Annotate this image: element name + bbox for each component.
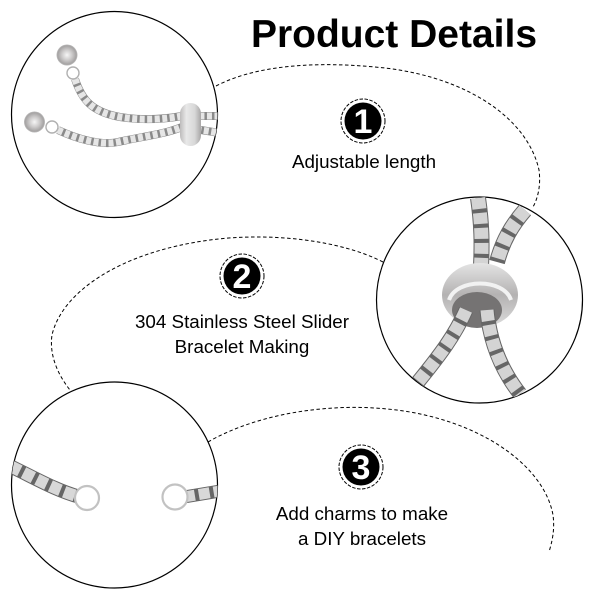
panel: right circle with slider close-up xyxy=(376,197,582,403)
slider bead xyxy=(442,263,518,327)
jump rings xyxy=(46,67,79,133)
chain: lower left strand xyxy=(418,310,466,382)
badge 2: 2 xyxy=(233,258,251,296)
chain: upper strand xyxy=(75,79,220,119)
end ball upper xyxy=(56,44,78,66)
chain: left strand xyxy=(10,466,80,497)
jump ring right xyxy=(162,484,188,510)
title: Product Details xyxy=(251,13,537,56)
connector: dashed line from circle 2 to circle 3 xyxy=(51,237,383,390)
connector: dashed line from circle 1 to circle 2 xyxy=(216,65,540,207)
text: stainless steel slider: 304 Stainless Steel Slider xyxy=(135,311,349,332)
slider bead xyxy=(180,103,201,146)
jump ring left xyxy=(75,486,99,510)
badge 3 xyxy=(339,445,383,489)
bead hole xyxy=(452,292,502,328)
text: adjustable length: Adjustable length xyxy=(292,151,436,172)
panel: bottom-left circle with open chain ends xyxy=(10,382,220,588)
badge 3: 3 xyxy=(352,449,370,487)
badge 2 xyxy=(220,254,264,298)
chain: right strand xyxy=(184,491,220,497)
chain: top right strand xyxy=(497,210,525,262)
text: add charms: a DIY bracelets xyxy=(298,528,426,549)
text: add charms: Add charms to make xyxy=(276,503,448,524)
end ball lower xyxy=(24,112,45,132)
connector: dashed line from circle 3 downward right xyxy=(208,407,554,552)
panel: top-left circle with chain ends and slider xyxy=(12,12,220,218)
badge 1 xyxy=(341,99,385,143)
chain: top left strand xyxy=(478,198,482,266)
badge 1: 1 xyxy=(354,103,372,141)
chain: lower strand xyxy=(58,127,220,143)
text: stainless steel slider: Bracelet Making xyxy=(175,336,309,357)
bead highlight xyxy=(449,284,511,300)
chain: lower right strand xyxy=(487,310,520,394)
